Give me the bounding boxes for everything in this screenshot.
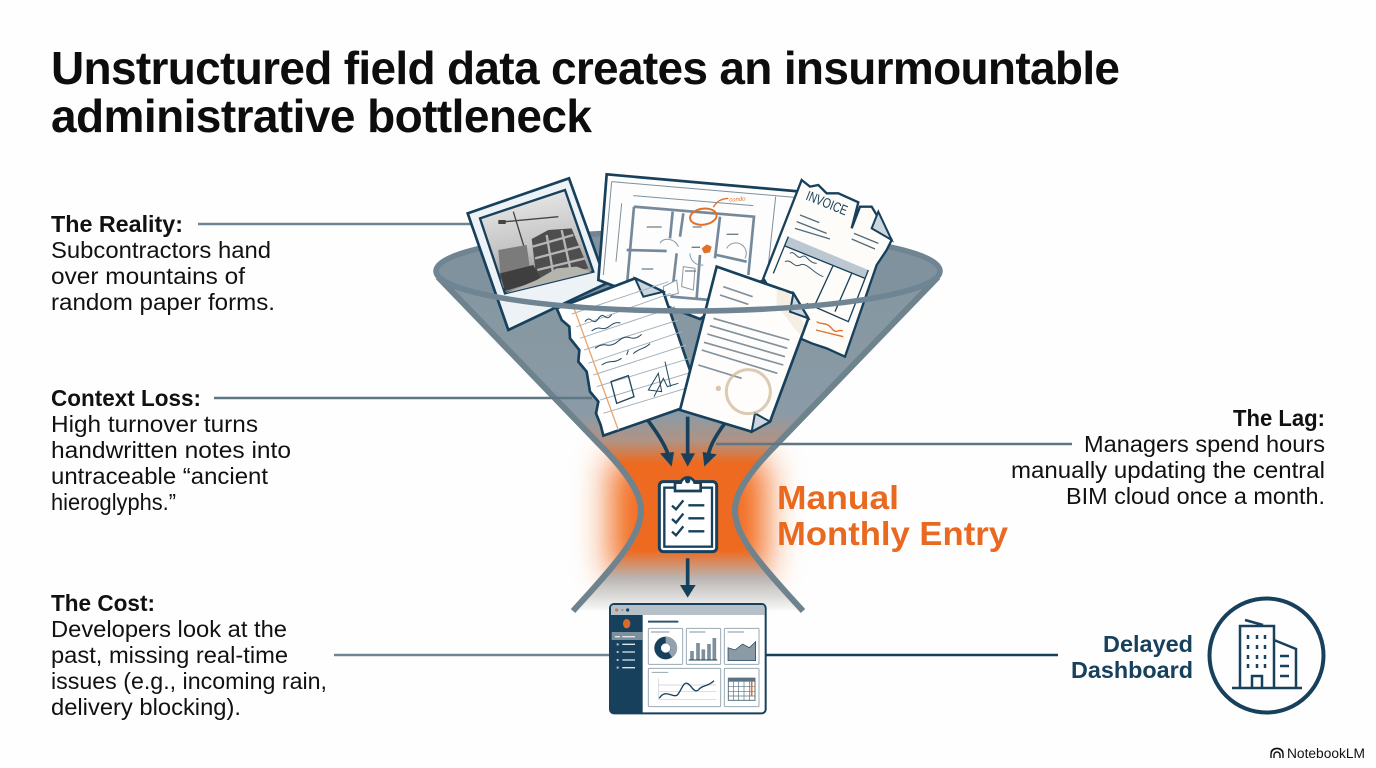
- invoice with torn edge: [763, 180, 892, 357]
- text block: the reality: The Reality:: [51, 211, 183, 237]
- notebooklm mark: NotebookLM: [1287, 746, 1365, 761]
- leader line: delayed dashboard: [764, 654, 1058, 656]
- text block: the lag: [1011, 405, 1325, 509]
- text block: context loss: hieroglyphs.”: [51, 489, 176, 515]
- leader line: the cost: [334, 654, 612, 656]
- dashboard title bar: [611, 605, 765, 615]
- text block: the cost: The Cost:: [51, 590, 155, 616]
- bar chart panel: [686, 628, 721, 664]
- text block: the lag: manually updating the central: [1011, 457, 1325, 483]
- arrows into clipboard: [645, 417, 730, 467]
- leader line: context loss: [214, 397, 592, 399]
- text block: the cost: delivery blocking).: [51, 694, 241, 720]
- text block: the cost: past, missing real-time: [51, 642, 288, 668]
- text block: the lag: The Lag:: [1233, 405, 1325, 431]
- text block: the lag: Managers spend hours: [1084, 431, 1325, 457]
- donut chart panel: [648, 628, 683, 664]
- funnel left edge: [438, 277, 641, 611]
- text block: context loss: handwritten notes into: [51, 437, 291, 463]
- icon: building in circle: [1210, 598, 1324, 712]
- blueprint sheet: condo: [729, 196, 746, 204]
- clipboard icon: [659, 478, 717, 552]
- funnel body: [438, 241, 938, 610]
- text block: context loss: Context Loss:: [51, 385, 201, 411]
- invoice with torn edge: INVOICE: [804, 187, 850, 218]
- text block: the cost: Developers look at the: [51, 616, 287, 642]
- label: delayed dashboard: Dashboard: [1071, 657, 1193, 683]
- funnel rim front: [436, 271, 940, 311]
- label: manual monthly entry: Manual: [777, 479, 899, 516]
- leader line: the reality: [198, 223, 480, 225]
- text block: the cost: issues (e.g., incoming rain,: [51, 668, 327, 694]
- title: administrative bottleneck: [51, 90, 592, 142]
- text block: the reality: over mountains of: [51, 263, 246, 289]
- text block: the reality: Subcontractors hand: [51, 237, 271, 263]
- line chart panel: [648, 668, 721, 707]
- blueprint sheet: [598, 174, 802, 319]
- area chart panel: [724, 628, 759, 664]
- text block: the lag: BIM cloud once a month.: [1066, 483, 1325, 509]
- funnel rim back: [436, 231, 940, 311]
- text block: the reality: [51, 211, 275, 315]
- text block: the reality: random paper forms.: [51, 289, 275, 315]
- dashboard screen: [610, 604, 766, 713]
- label: manual monthly entry: Monthly Entry: [777, 515, 1009, 552]
- calendar panel: [724, 668, 759, 707]
- text block: context loss: untraceable “ancient: [51, 463, 269, 489]
- photo of construction site: [468, 178, 607, 330]
- dashboard sidebar: [610, 615, 643, 713]
- arrow to dashboard: [680, 558, 696, 598]
- label: delayed dashboard: Delayed: [1103, 631, 1193, 657]
- text block: the cost: [51, 590, 327, 720]
- title: [51, 42, 1120, 142]
- orange glow around funnel neck: [610, 458, 766, 576]
- title: Unstructured field data creates an insurmountable: [51, 42, 1120, 94]
- leader line: the lag: [716, 443, 1072, 445]
- label: delayed dashboard: [1071, 631, 1193, 683]
- text block: context loss: [51, 385, 291, 515]
- funnel right edge: [735, 277, 938, 611]
- stained text document: [680, 267, 808, 432]
- text block: context loss: High turnover turns: [51, 411, 258, 437]
- handwritten note page: [557, 278, 701, 436]
- label: manual monthly entry: [777, 479, 1009, 552]
